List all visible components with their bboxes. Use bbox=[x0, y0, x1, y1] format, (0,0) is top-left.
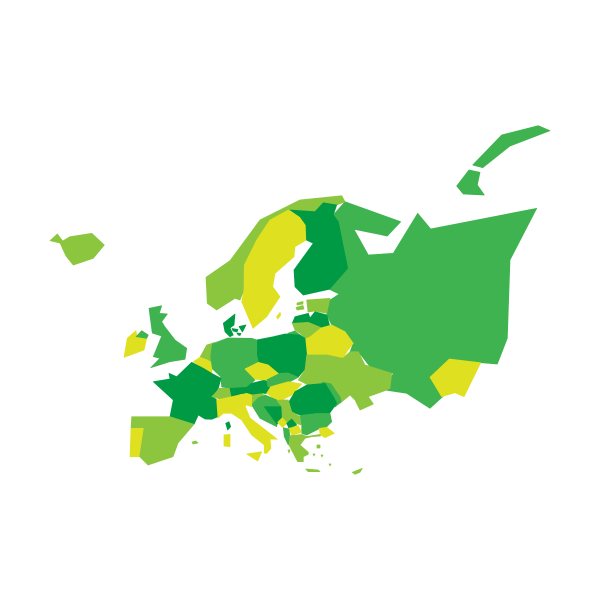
islands: Aegean bbox=[288, 445, 331, 466]
island: Sicily bbox=[247, 452, 262, 461]
country: Netherlands bbox=[200, 342, 217, 362]
island: Gotland bbox=[277, 312, 281, 319]
country: Sweden bbox=[242, 210, 306, 328]
country: Latvia bbox=[292, 312, 330, 328]
country: Serbia bbox=[277, 400, 301, 425]
country: Estonia bbox=[307, 298, 330, 313]
country: Bulgaria bbox=[300, 414, 332, 435]
territory: Novaya Zemlya south bbox=[457, 170, 484, 195]
country: Albania bbox=[283, 428, 290, 445]
country: Norway bbox=[206, 196, 345, 310]
country: France bbox=[153, 362, 221, 424]
country: Kazakhstan bbox=[430, 359, 481, 397]
country: Bosnia and Herzegovina bbox=[264, 407, 282, 424]
country: Lithuania bbox=[292, 322, 322, 338]
country: Ireland bbox=[124, 331, 147, 357]
country: Poland bbox=[257, 334, 310, 377]
country: Turkey (Europe) bbox=[319, 427, 334, 438]
island: Corsica bbox=[226, 422, 231, 430]
country: Slovenia bbox=[252, 393, 264, 405]
country: Montenegro bbox=[278, 418, 287, 427]
country: Ukraine bbox=[298, 352, 392, 410]
country: Switzerland bbox=[212, 388, 232, 399]
country: Greece bbox=[289, 434, 320, 462]
islands: Saaremaa and Hiiumaa bbox=[296, 302, 304, 310]
country: Denmark bbox=[223, 314, 246, 337]
territory: Novaya Zemlya north bbox=[473, 126, 550, 168]
country: Kosovo bbox=[287, 419, 297, 428]
territory: Kaliningrad bbox=[288, 331, 301, 336]
island: Cyprus bbox=[352, 468, 362, 474]
country: Russia bbox=[327, 202, 537, 408]
country: Spain bbox=[131, 417, 194, 465]
country: Romania bbox=[288, 383, 337, 415]
island: Crete bbox=[306, 469, 320, 472]
country: Slovakia bbox=[267, 373, 298, 387]
country: Iceland bbox=[50, 233, 104, 265]
country: Finland bbox=[290, 203, 348, 295]
territory: Northern Ireland bbox=[136, 331, 148, 338]
country: Portugal bbox=[130, 428, 143, 457]
country: Hungary bbox=[267, 382, 302, 402]
map: countries bbox=[50, 126, 550, 474]
country: Belgium bbox=[193, 357, 212, 373]
country: Germany bbox=[210, 338, 258, 388]
island: Balearic bbox=[192, 441, 198, 444]
country: Austria bbox=[230, 380, 271, 397]
country: North Macedonia bbox=[289, 426, 302, 435]
country: Belarus bbox=[305, 325, 353, 358]
country: United Kingdom bbox=[149, 306, 187, 368]
country: Croatia bbox=[252, 395, 283, 427]
country: Moldova bbox=[322, 382, 341, 407]
country: Czech Republic bbox=[245, 362, 280, 380]
island: Sardinia bbox=[224, 434, 230, 447]
country: Italy bbox=[217, 393, 277, 453]
